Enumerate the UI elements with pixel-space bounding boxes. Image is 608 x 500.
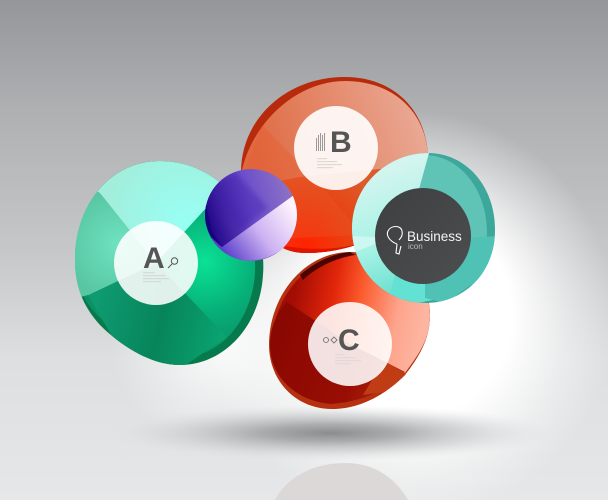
blob: teal ring [352, 153, 495, 303]
icon: key bulb [387, 226, 402, 254]
panel C label [308, 302, 392, 386]
blob C: red [265, 248, 435, 413]
floor shadow [105, 405, 555, 461]
icon text: icon [408, 242, 423, 251]
panel B label: B [330, 126, 352, 159]
tiny caption A [143, 272, 169, 282]
purple sphere [204, 169, 300, 261]
blob A: green [75, 161, 264, 365]
blob B: red [241, 77, 428, 253]
icon: magnifier [168, 258, 178, 268]
tiny caption B [317, 158, 342, 168]
icon: bars [316, 133, 325, 151]
tiny caption C [335, 354, 361, 364]
panel B label [294, 106, 378, 190]
panel A label: A [143, 242, 165, 275]
icon: circle and diamond [324, 337, 337, 343]
reflection [275, 463, 408, 500]
business text: Business [407, 229, 462, 244]
business icon panel [375, 188, 471, 284]
panel A label [114, 221, 198, 305]
panel C label: C [338, 324, 360, 357]
